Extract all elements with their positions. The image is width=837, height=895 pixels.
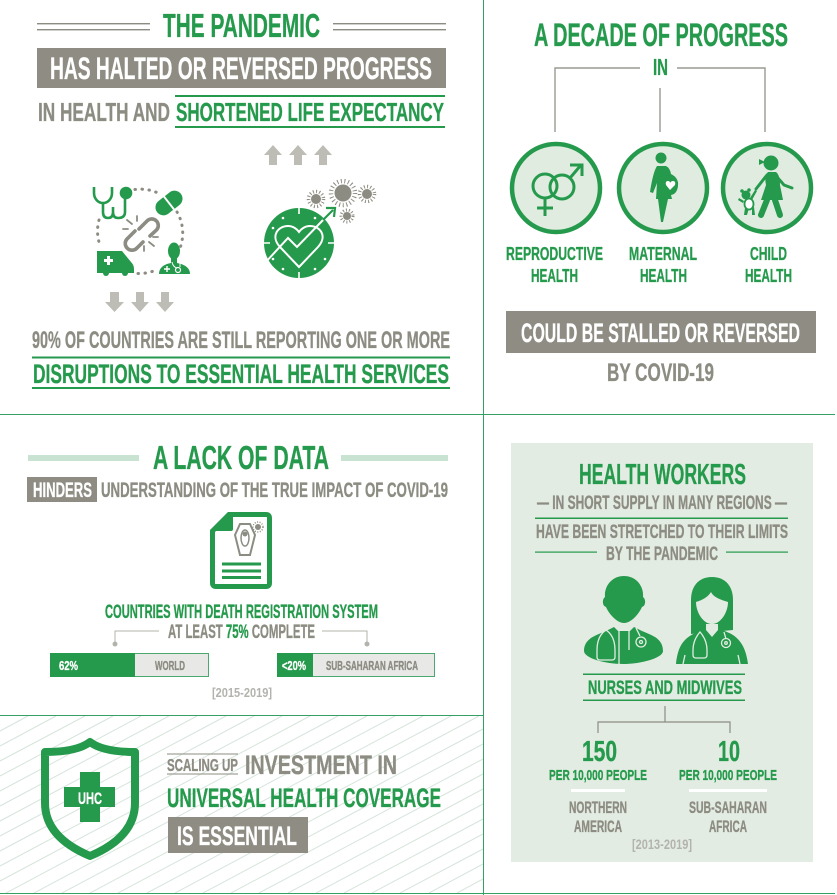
stat: 10 sub-saharan africa: SUB-SAHARAN (689, 799, 767, 817)
banner: is essential (168, 817, 308, 853)
text: disruptions to essential health services: DISRUPTIONS TO ESSENTIAL HEALTH SERVICES (33, 359, 449, 389)
icon: uhc shield (45, 742, 135, 856)
text: by covid-19: BY COVID-19 (607, 359, 714, 387)
heading: the pandemic: THE PANDEMIC (163, 7, 320, 44)
text: by the pandemic: BY THE PANDEMIC (606, 543, 718, 565)
bar: sub-saharan africa under 20% (277, 653, 434, 677)
icon: stethoscope (94, 187, 131, 218)
stat: 10 sub-saharan africa: PER 10,000 PEOPLE (679, 767, 777, 784)
icon: virus particles (308, 181, 374, 222)
connector brackets (112, 631, 370, 646)
icon: pill (152, 187, 186, 219)
banner: could be stalled or reversed (506, 311, 816, 353)
text: universal health coverage: UNIVERSAL HEALTH COVERAGE (167, 783, 441, 813)
text: countries with death registration system: COUNTRIES WITH DEATH REGISTRATION SYSTEM (105, 602, 378, 623)
connector tree (598, 706, 730, 733)
banner: is essential: IS ESSENTIAL (177, 821, 297, 851)
label: maternal health: MATERNAL (629, 243, 697, 264)
icon: child health (723, 144, 811, 232)
stat: 150 northern america: AMERICA (574, 818, 622, 836)
panel: health workers (511, 443, 813, 862)
bar: world 62%: WORLD (155, 659, 185, 673)
text: 90% of countries: 90% OF COUNTRIES ARE STILL REPORTING ONE OR MORE (32, 327, 450, 354)
arrows down (105, 292, 174, 312)
panel: a lack of data (27, 439, 448, 700)
text: understanding of the true impact: UNDERSTANDING OF THE TRUE IMPACT OF COVID-19 (101, 479, 448, 502)
text: at least 75% complete: AT LEAST 75% COMPLETE (168, 622, 315, 643)
label: maternal health: HEALTH (640, 265, 687, 286)
stat: 150 northern america (549, 736, 647, 836)
label: child health: CHILD (750, 243, 787, 264)
text: in: IN (653, 54, 668, 80)
panel: scaling up background (0, 716, 483, 893)
icon: maternal health (619, 144, 707, 232)
arrows up (264, 145, 332, 165)
bar: sub-saharan africa under 20%: <20% (282, 659, 306, 673)
stat: 150 northern america: NORTHERN (569, 799, 627, 817)
bar: world 62% (50, 653, 208, 677)
text: scaling up: SCALING UP (167, 755, 238, 775)
text: investment in: INVESTMENT IN (245, 750, 397, 780)
label: maternal health (629, 243, 697, 286)
text: shortened life expectancy: SHORTENED LIFE EXPECTANCY (176, 97, 444, 127)
label: child health: HEALTH (745, 265, 792, 286)
bar: sub-saharan africa under 20%: SUB-SAHARAN AFRICA (326, 659, 418, 673)
banner: has halted or reversed progress (37, 48, 446, 88)
icon: reproductive health (512, 144, 600, 232)
panel: a decade of progress (506, 17, 816, 387)
label: reproductive health: REPRODUCTIVE (506, 243, 603, 264)
stat: 10 sub-saharan africa (679, 736, 777, 836)
text: scaling up (167, 754, 238, 775)
icon: uhc shield: UHC (78, 789, 102, 808)
text: nurses and midwives: NURSES AND MIDWIVES (588, 677, 742, 699)
stat: 150 northern america: 150 (582, 736, 617, 768)
label: reproductive health (506, 243, 603, 286)
icon: ambulance (97, 251, 134, 276)
stat: 10 sub-saharan africa: 10 (718, 736, 740, 768)
label: reproductive health: HEALTH (531, 265, 578, 286)
panel: scaling up investment (45, 742, 441, 856)
icon: doctor (159, 242, 190, 274)
icon: male health worker (584, 576, 663, 664)
stat: 150 northern america: PER 10,000 PEOPLE (549, 767, 647, 784)
banner: has halted or reversed progress: HAS HALTED OR REVERSED PROGRESS (50, 50, 432, 86)
icon: heart clock with virus (264, 181, 374, 278)
heading: a lack of data: A LACK OF DATA (153, 439, 329, 476)
tag: hinders (27, 477, 97, 502)
icon: health services broken chain (94, 187, 190, 276)
stat: 10 sub-saharan africa: AFRICA (709, 818, 747, 836)
text: years 2015-2019: [2015-2019] (212, 685, 272, 700)
label: child health (745, 243, 792, 286)
text: years 2013-2019: [2013-2019] (632, 837, 692, 852)
icon: female health worker (676, 577, 748, 664)
panel: the pandemic (32, 7, 450, 389)
text: in health and: IN HEALTH AND (38, 97, 170, 127)
icon: broken chain link (123, 216, 158, 251)
tag: hinders: HINDERS (33, 479, 92, 502)
connector bracket (555, 68, 765, 132)
bar: world 62%: 62% (59, 659, 78, 673)
icon: death record document (212, 514, 270, 586)
